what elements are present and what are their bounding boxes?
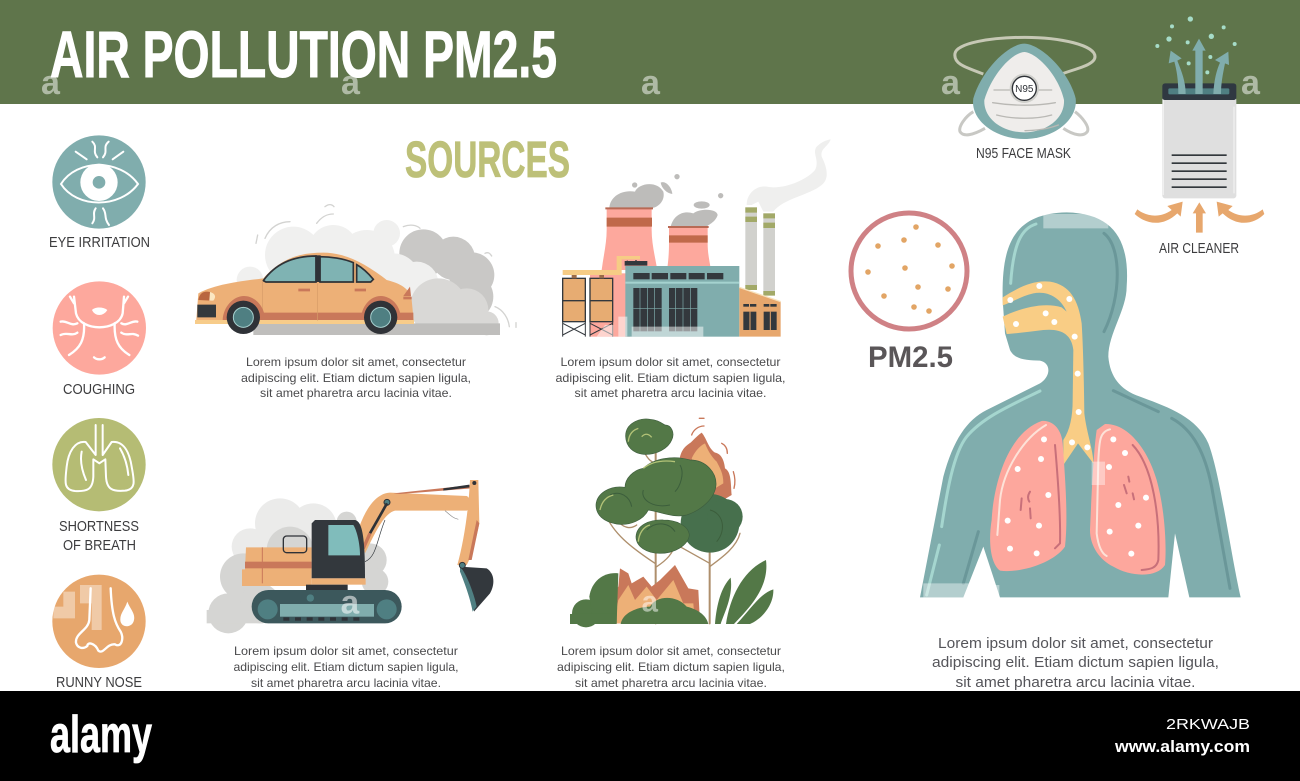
header watermarks: a <box>341 64 361 102</box>
header watermarks: a <box>641 64 661 102</box>
pipes <box>563 256 640 275</box>
watermarks <box>923 214 1108 597</box>
stacks <box>745 207 757 289</box>
body <box>196 253 414 323</box>
label: N95 face mask: N95 FACE MASK <box>976 146 1071 162</box>
dust <box>232 498 337 565</box>
icon: N95 face mask <box>955 37 1095 139</box>
label: shortness of breath: SHORTNESS <box>59 519 139 535</box>
footer logo: alamy <box>50 706 152 764</box>
illustration: excavator <box>207 480 493 633</box>
icon: PM2.5 circle <box>851 213 967 329</box>
text: wildfire: Lorem ipsum dolor sit amet, consectetur <box>561 644 781 658</box>
icon: eye irritation <box>52 135 146 229</box>
header watermarks: a <box>941 64 961 102</box>
smoke <box>399 229 494 320</box>
footer image id <box>1114 716 1250 756</box>
text: respiratory: Lorem ipsum dolor sit amet, consectetur <box>938 635 1213 652</box>
header watermarks: a <box>41 64 61 102</box>
icon: runny nose <box>52 575 146 668</box>
particles <box>1005 283 1149 557</box>
text: excavator <box>234 644 458 690</box>
text: wildfire: adipiscing elit. Etiam dictum sapien ligula, <box>557 660 785 674</box>
watermark <box>597 317 703 337</box>
tracks <box>252 590 402 623</box>
heading: sources: SOURCES <box>405 131 570 188</box>
text: excavator: sit amet pharetra arcu lacinia vitae. <box>251 676 441 690</box>
icon: coughing <box>53 281 146 375</box>
silos <box>563 278 613 322</box>
illustration: excavator: a <box>341 584 360 621</box>
cab <box>312 520 365 578</box>
air in arrows <box>1135 202 1264 233</box>
trunks <box>605 450 740 623</box>
white smoke <box>747 139 831 212</box>
building <box>625 266 739 337</box>
rear body <box>242 547 312 586</box>
label: shortness of breath: OF BREATH <box>63 538 136 554</box>
side building <box>739 287 781 337</box>
text: excavator: adipiscing elit. Etiam dictum sapien ligula, <box>234 660 458 674</box>
airways <box>1003 281 1093 465</box>
text: wildfire <box>557 644 785 690</box>
text: respiratory <box>932 635 1219 691</box>
text: car: Lorem ipsum dolor sit amet, consectetur <box>246 355 466 369</box>
text: car: sit amet pharetra arcu lacinia vitae. <box>260 386 452 400</box>
label: coughing: COUGHING <box>63 382 135 398</box>
text: factory: Lorem ipsum dolor sit amet, consectetur <box>560 355 781 369</box>
lungs <box>990 421 1066 571</box>
body highlights <box>927 224 1230 595</box>
footer image id: www.alamy.com <box>1114 738 1250 756</box>
illustration: wildfire trees <box>570 418 773 627</box>
label: runny nose: RUNNY NOSE <box>56 675 142 691</box>
text: respiratory: sit amet pharetra arcu lacinia vitae. <box>956 674 1196 691</box>
towers <box>602 208 657 270</box>
gray smoke <box>609 174 723 227</box>
header watermarks <box>41 64 1261 102</box>
flames <box>679 433 732 510</box>
text: respiratory: adipiscing elit. Etiam dictum sapien ligula, <box>932 654 1219 671</box>
icon: shortness of breath <box>52 418 146 511</box>
text: car: adipiscing elit. Etiam dictum sapien ligula, <box>241 371 471 385</box>
text: factory: adipiscing elit. Etiam dictum sapien ligula, <box>556 371 786 385</box>
footer band <box>0 691 1300 781</box>
bucket <box>460 567 493 612</box>
arm <box>359 493 470 553</box>
footer image id: 2RKWAJB <box>1166 716 1250 733</box>
canopy <box>681 494 743 553</box>
icon: air cleaner <box>1135 16 1264 233</box>
text: wildfire: sit amet pharetra arcu lacinia vitae. <box>575 676 767 690</box>
illustration: wildfire trees: a <box>642 586 659 619</box>
illustration: human respiratory system <box>920 212 1241 597</box>
text: excavator: Lorem ipsum dolor sit amet, consectetur <box>234 644 458 658</box>
label: shortness of breath <box>59 519 139 554</box>
label: air cleaner: AIR CLEANER <box>1159 241 1239 257</box>
air out arrows <box>1169 39 1229 94</box>
label: eye irritation: EYE IRRITATION <box>49 235 150 251</box>
header watermarks: a <box>1241 64 1261 102</box>
icon: N95 face mask: N95 <box>1015 84 1034 95</box>
title: AIR POLLUTION PM2.5 <box>50 17 557 91</box>
text: factory <box>556 355 786 400</box>
text: car <box>241 355 471 400</box>
label: PM2.5: PM2.5 <box>868 341 953 374</box>
lower flames <box>605 565 700 623</box>
header band <box>0 0 1300 104</box>
illustration: factory <box>563 139 831 337</box>
illustration: car with smoke <box>195 205 516 335</box>
bushes <box>570 573 618 627</box>
text: factory: sit amet pharetra arcu lacinia vitae. <box>574 386 766 400</box>
